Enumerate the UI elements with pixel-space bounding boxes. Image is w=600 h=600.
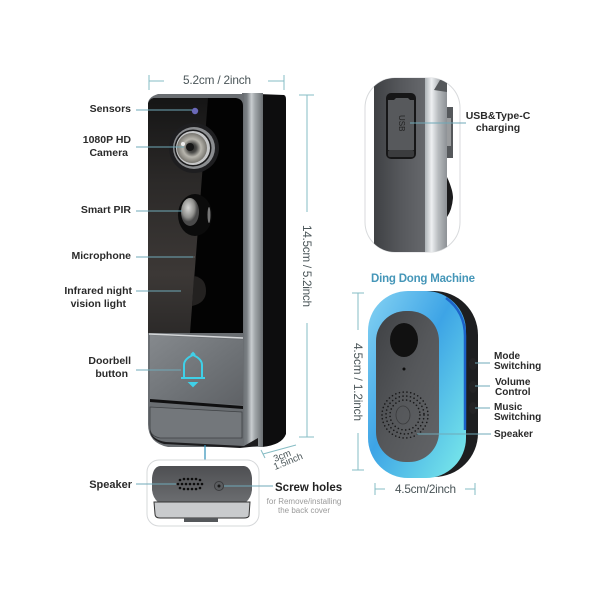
label: infrared night vision: vision light: [71, 298, 126, 310]
dimension: width 5.2cm: [149, 73, 284, 90]
label: doorbell button: button: [95, 368, 128, 380]
label: USB charging: [410, 110, 531, 134]
microphone hole: [193, 256, 195, 258]
camera window: [390, 323, 418, 357]
close-up device: [374, 78, 453, 252]
label: volume control: Control: [495, 387, 531, 398]
panel: USB port close-up: [365, 78, 460, 252]
label: doorbell button: [88, 355, 181, 380]
dimension: depth 3cm: 3cm: [272, 448, 293, 465]
panel: underside view: [147, 460, 259, 526]
label: music switching: Music: [494, 402, 523, 413]
dimension: height 14.5cm: [299, 95, 314, 437]
label: camera: [83, 134, 184, 159]
bell icon: [181, 353, 205, 386]
label: USB charging: charging: [476, 122, 520, 134]
dimension: chime width: 4.5cm/2inch: [395, 482, 456, 496]
label: camera: 1080P HD: [83, 134, 131, 146]
side buttons: [469, 358, 477, 414]
chime speaker grille: [382, 392, 428, 438]
label: camera: Camera: [89, 147, 128, 159]
title: Ding Dong Machine: Ding Dong Machine: [371, 273, 475, 285]
chime unit: [368, 291, 478, 478]
underside body: [152, 466, 252, 502]
label: music switching: Switching: [494, 412, 541, 423]
label: sensors: Sensors: [90, 103, 131, 115]
USB port cover: [386, 93, 416, 159]
doorbell front frame: [148, 94, 244, 447]
mic dot: [402, 368, 406, 370]
label: chime speaker: Speaker: [494, 429, 533, 440]
label: music switching: [475, 402, 541, 423]
label: smart PIR: [81, 204, 182, 216]
label: microphone: [72, 250, 193, 262]
label: mode switching: Mode: [494, 351, 521, 362]
label: volume control: Volume: [495, 377, 531, 388]
black side of doorbell: [258, 94, 286, 447]
label: smart PIR: Smart PIR: [81, 204, 131, 216]
label: screw holes: Screw holes: [275, 482, 342, 494]
glass panel: [148, 98, 243, 333]
label: microphone: Microphone: [72, 250, 131, 262]
infrared light: [192, 276, 206, 306]
label: infrared night vision: Infrared night: [64, 285, 132, 297]
dimension: chime width: [375, 482, 475, 496]
doorbell button panel: [150, 335, 243, 405]
dimension: depth 3cm: [261, 445, 305, 473]
speaker grille: [177, 478, 203, 490]
dimension: height 14.5cm: 14.5cm / 5.2inch: [300, 225, 314, 307]
metal lip: [154, 502, 250, 518]
label: sensors: [90, 103, 192, 115]
ring dark blue edge: [446, 298, 465, 430]
dimension: chime height: [351, 293, 365, 470]
label: USB charging: USB&Type-C: [466, 110, 531, 122]
label: screw holes: for Remove/installing: [267, 497, 341, 506]
camera lens: [169, 123, 219, 173]
label: speaker: Speaker: [89, 479, 133, 491]
label: speaker: [89, 479, 176, 491]
clip: [184, 518, 218, 522]
silver edge strip: [240, 93, 263, 447]
dimension: chime height: 4.5cm / 1.2inch: [351, 343, 365, 421]
dimension: width 5.2cm: 5.2cm / 2inch: [183, 73, 251, 87]
sensor dot: [192, 108, 198, 114]
chime face: [376, 311, 439, 462]
label: chime speaker: [417, 429, 533, 440]
label: mode switching: Switching: [494, 361, 541, 372]
label: screw holes: the back cover: [278, 506, 330, 515]
dimension: depth 3cm: 1.5inch: [272, 451, 305, 473]
panel shadow band: [150, 399, 243, 409]
USB port cover: USB: [397, 115, 406, 131]
PIR sensor: [178, 194, 212, 236]
chime back shell: [385, 291, 478, 477]
chime glow ring: [368, 291, 466, 478]
label: volume control: [475, 377, 531, 398]
lower panel: [150, 407, 242, 438]
bottom edge: [150, 430, 258, 448]
label: doorbell button: Doorbell: [88, 355, 131, 367]
panel highlight: [149, 334, 243, 338]
arrow to underside view: [201, 445, 209, 474]
doorbell main unit: [148, 93, 286, 448]
label: infrared night vision: [64, 285, 181, 310]
label: mode switching: [475, 351, 541, 372]
screw hole: [214, 482, 224, 490]
label: screw holes: [224, 482, 342, 515]
